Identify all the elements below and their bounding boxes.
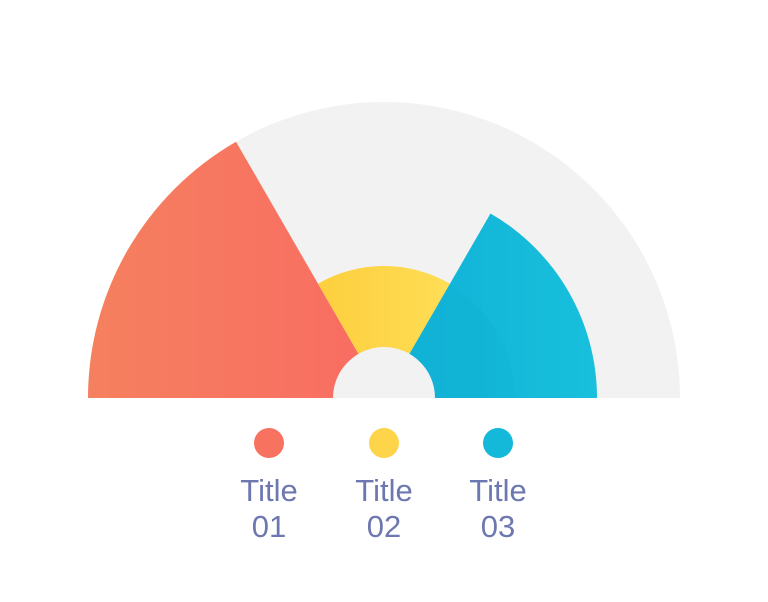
segment: yellow Title 02 xyxy=(318,266,450,398)
legend 01: 01 xyxy=(252,509,286,544)
legend 03: Title xyxy=(469,473,527,508)
legend 02: Title xyxy=(355,473,413,508)
segment: red Title 01 xyxy=(88,142,384,398)
center circle xyxy=(333,347,435,398)
legend 02: 02 xyxy=(367,509,401,544)
legend 03 xyxy=(469,428,527,544)
gray background semicircle xyxy=(88,102,680,398)
legend 01: Title xyxy=(240,473,298,508)
legend 01 xyxy=(240,428,298,544)
segment: blue Title 03 xyxy=(384,214,597,398)
legend 03: 03 xyxy=(481,509,515,544)
legend 02 xyxy=(355,428,413,544)
